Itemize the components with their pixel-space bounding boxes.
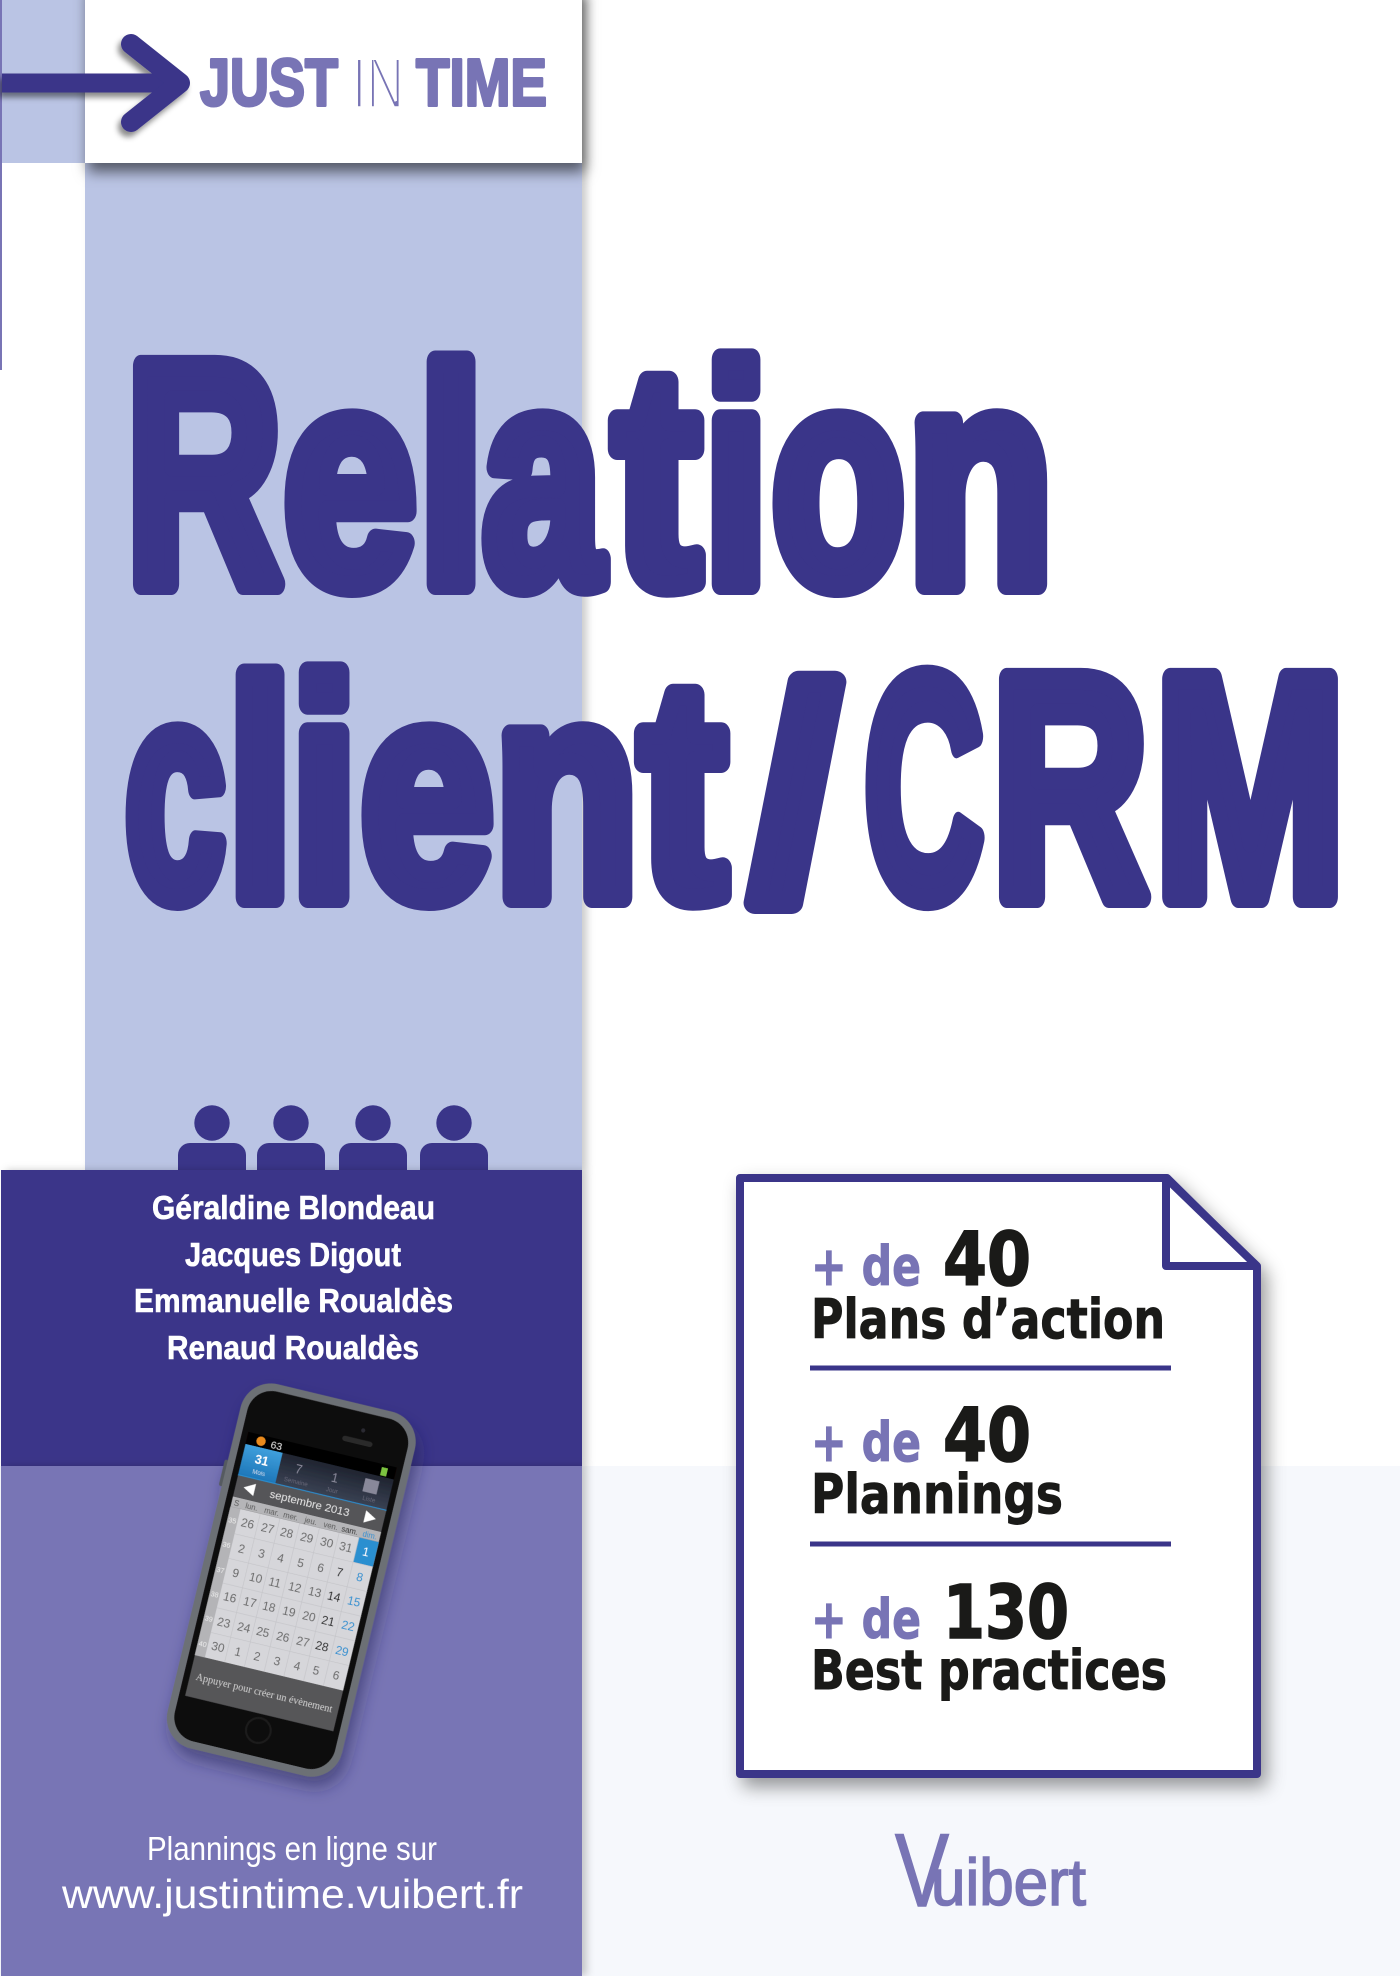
icon: smartphone with calendar: 14 <box>326 1588 342 1605</box>
icon: smartphone with calendar: jeu. <box>303 1515 318 1527</box>
icon: smartphone with calendar: 30 <box>210 1639 226 1656</box>
icon: smartphone with calendar: 30 <box>319 1534 335 1551</box>
title: Relation client / CRM: l <box>419 307 484 650</box>
title: Relation client / CRM: R <box>992 611 1148 965</box>
folded corner <box>1166 1178 1257 1266</box>
background: bottom right tint <box>0 1466 1400 1976</box>
title: Relation client / CRM: / <box>752 628 839 960</box>
icon: smartphone with calendar: 4 <box>276 1551 286 1566</box>
icon: smartphone with calendar: 38 <box>210 1589 220 1600</box>
icon: smartphone with calendar: 40 <box>198 1639 208 1649</box>
icon: smartphone with calendar: 5 <box>311 1663 321 1678</box>
title: Relation client / CRM: C <box>864 611 983 965</box>
icon: smartphone with calendar: 21 <box>320 1613 336 1630</box>
divider <box>810 1542 1171 1546</box>
icon: smartphone with calendar: dim. <box>362 1529 378 1541</box>
icon: smartphone with calendar: 39 <box>204 1613 214 1624</box>
icon: smartphone with calendar: 28 <box>279 1525 295 1542</box>
icon: smartphone with calendar: Semaine <box>283 1476 309 1489</box>
authors list <box>134 1189 453 1366</box>
divider <box>810 1366 1171 1370</box>
icon: smartphone with calendar: 18 <box>261 1599 277 1615</box>
icon: smartphone with calendar: mar. <box>263 1506 280 1518</box>
icon: smartphone with calendar: septembre 2013 <box>268 1489 351 1520</box>
logo: JUST IN TIME: JUST <box>200 46 338 120</box>
logo: JUST IN TIME: IN <box>352 44 404 124</box>
online plannings text: www.justintime.vuibert.fr <box>61 1871 523 1917</box>
icon: smartphone with calendar: 9 <box>231 1566 241 1581</box>
icon: smartphone with calendar: 25 <box>255 1624 271 1641</box>
icon: smartphone with calendar: 13 <box>307 1584 323 1601</box>
icon: smartphone with calendar: Jour <box>325 1486 338 1496</box>
icon: smartphone with calendar: 27 <box>260 1520 276 1537</box>
panel: bottom purple background <box>1 1466 582 1976</box>
icon: smartphone with calendar: 12 <box>287 1579 303 1596</box>
title: Relation client / CRM: t <box>614 303 700 650</box>
icon: smartphone with calendar: 29 <box>334 1643 350 1660</box>
online plannings text <box>61 1830 523 1917</box>
icon: smartphone with calendar: 28 <box>314 1638 330 1655</box>
icon: smartphone with calendar: 19 <box>281 1603 297 1620</box>
title: Relation client / CRM: e <box>284 307 416 649</box>
figure: 40 plannings: + de <box>811 1411 921 1474</box>
panel: document with key figures <box>740 1178 1257 1774</box>
title: Relation client / CRM: c <box>125 620 226 962</box>
figure: 40 plans d'action: + de <box>811 1235 921 1298</box>
authors list: Géraldine Blondeau <box>152 1189 435 1226</box>
figure: 130 best practices <box>811 1570 1167 1702</box>
panel: authors background <box>1 1170 582 1466</box>
icon: smartphone with calendar: 23 <box>216 1614 232 1631</box>
icon: smartphone with calendar: 1 <box>361 1544 371 1560</box>
title: Relation client / CRM: e <box>361 620 493 962</box>
icon: smartphone with calendar: Appuyer pour créer un évènement <box>195 1672 333 1716</box>
logo: Vuibert: uibert <box>931 1845 1086 1919</box>
logo: Vuibert: V <box>895 1813 949 1929</box>
title: Relation client / CRM: n <box>907 307 1053 649</box>
icon: smartphone with calendar: 26 <box>240 1515 256 1532</box>
logo: Vuibert <box>895 1813 1086 1929</box>
title: Relation client / CRM: o <box>772 307 905 649</box>
icon: smartphone with calendar: 15 <box>346 1593 362 1610</box>
authors list: Renaud Roualdès <box>167 1329 419 1366</box>
icon: smartphone with calendar: 35 <box>228 1515 237 1526</box>
figure: 40 plans d'action: 40 <box>943 1217 1031 1303</box>
icon: smartphone with calendar: sam. <box>341 1524 359 1537</box>
figure: 40 plans d'action <box>811 1217 1165 1351</box>
icon: four people <box>178 1105 488 1172</box>
title: Relation client / CRM: R <box>126 298 282 652</box>
title: Relation client / CRM: a <box>483 307 603 649</box>
icon: smartphone with calendar: 31 <box>253 1452 270 1469</box>
icon: smartphone with calendar: 10 <box>248 1570 264 1587</box>
online plannings text: Plannings en ligne sur <box>147 1830 437 1867</box>
icon: smartphone with calendar: 27 <box>295 1633 311 1650</box>
icon: smartphone with calendar: 3 <box>272 1654 282 1669</box>
left edge line <box>0 0 2 370</box>
figure: 130 best practices: Best practices <box>811 1639 1167 1702</box>
figure: 130 best practices: 130 <box>943 1570 1069 1656</box>
logo: JUST IN TIME: TIME <box>416 46 547 120</box>
icon: smartphone with calendar: S <box>233 1498 240 1508</box>
icon: smartphone with calendar: 63 <box>269 1440 283 1453</box>
logo: JUST IN TIME <box>200 44 547 124</box>
title: Relation client / CRM: n <box>494 620 638 962</box>
figure: 40 plannings: Plannings <box>811 1463 1063 1526</box>
icon: smartphone with calendar: 7 <box>294 1462 304 1477</box>
icon: smartphone with calendar: Mois <box>251 1468 266 1478</box>
title: Relation client / CRM: i <box>290 616 358 963</box>
panel: collection header box <box>85 0 582 163</box>
icon: smartphone with calendar: 2 <box>237 1541 247 1557</box>
icon: smartphone with calendar: 26 <box>275 1629 291 1645</box>
icon: smartphone with calendar: 8 <box>355 1570 365 1585</box>
icon: smartphone with calendar: 6 <box>316 1560 326 1576</box>
icon: smartphone with calendar: lun. <box>245 1501 259 1513</box>
icon: smartphone with calendar: 29 <box>299 1530 315 1546</box>
panel: light blue vertical band <box>85 0 582 1170</box>
figure: 40 plannings: 40 <box>943 1393 1031 1479</box>
icon: smartphone with calendar: 24 <box>236 1619 252 1636</box>
icon: smartphone with calendar: 7 <box>335 1565 345 1580</box>
icon: smartphone with calendar: 1 <box>330 1471 340 1486</box>
icon: arrow <box>2 44 180 122</box>
icon: smartphone with calendar: 5 <box>296 1556 306 1571</box>
title: Relation client / CRM: t <box>640 616 726 963</box>
figure: 40 plannings <box>811 1393 1063 1526</box>
icon: smartphone with calendar: 36 <box>222 1539 232 1550</box>
icon: smartphone with calendar: 11 <box>267 1574 283 1591</box>
icon: smartphone with calendar: ven. <box>323 1520 339 1532</box>
icon: smartphone with calendar: 37 <box>216 1565 226 1575</box>
icon: smartphone with calendar <box>157 1376 422 1783</box>
title: Relation client / CRM: i <box>704 303 769 650</box>
document sheet <box>740 1178 1257 1774</box>
authors list: Emmanuelle Roualdès <box>134 1282 453 1319</box>
title: Relation client / CRM: l <box>228 620 293 963</box>
icon: smartphone with calendar: 6 <box>331 1668 341 1683</box>
icon: smartphone with calendar: 2 <box>252 1649 262 1664</box>
icon: smartphone with calendar: 3 <box>257 1546 267 1561</box>
icon: smartphone with calendar: Liste <box>362 1495 376 1505</box>
figure: 40 plans d'action: Plans d’action <box>811 1288 1165 1351</box>
figure: 130 best practices: + de <box>811 1588 921 1651</box>
icon: smartphone with calendar: 31 <box>338 1539 354 1556</box>
title: Relation client / CRM <box>125 298 1345 965</box>
icon: smartphone with calendar: 16 <box>222 1589 238 1606</box>
icon: smartphone with calendar: 20 <box>301 1608 317 1625</box>
icon: smartphone with calendar: 4 <box>292 1658 302 1674</box>
icon: smartphone with calendar: 17 <box>242 1594 258 1611</box>
icon: smartphone with calendar: 22 <box>340 1618 356 1634</box>
authors list: Jacques Digout <box>185 1236 401 1273</box>
icon: smartphone with calendar: mer. <box>282 1510 299 1522</box>
panel: top left light block <box>2 0 86 163</box>
icon: smartphone with calendar: 1 <box>233 1644 243 1660</box>
